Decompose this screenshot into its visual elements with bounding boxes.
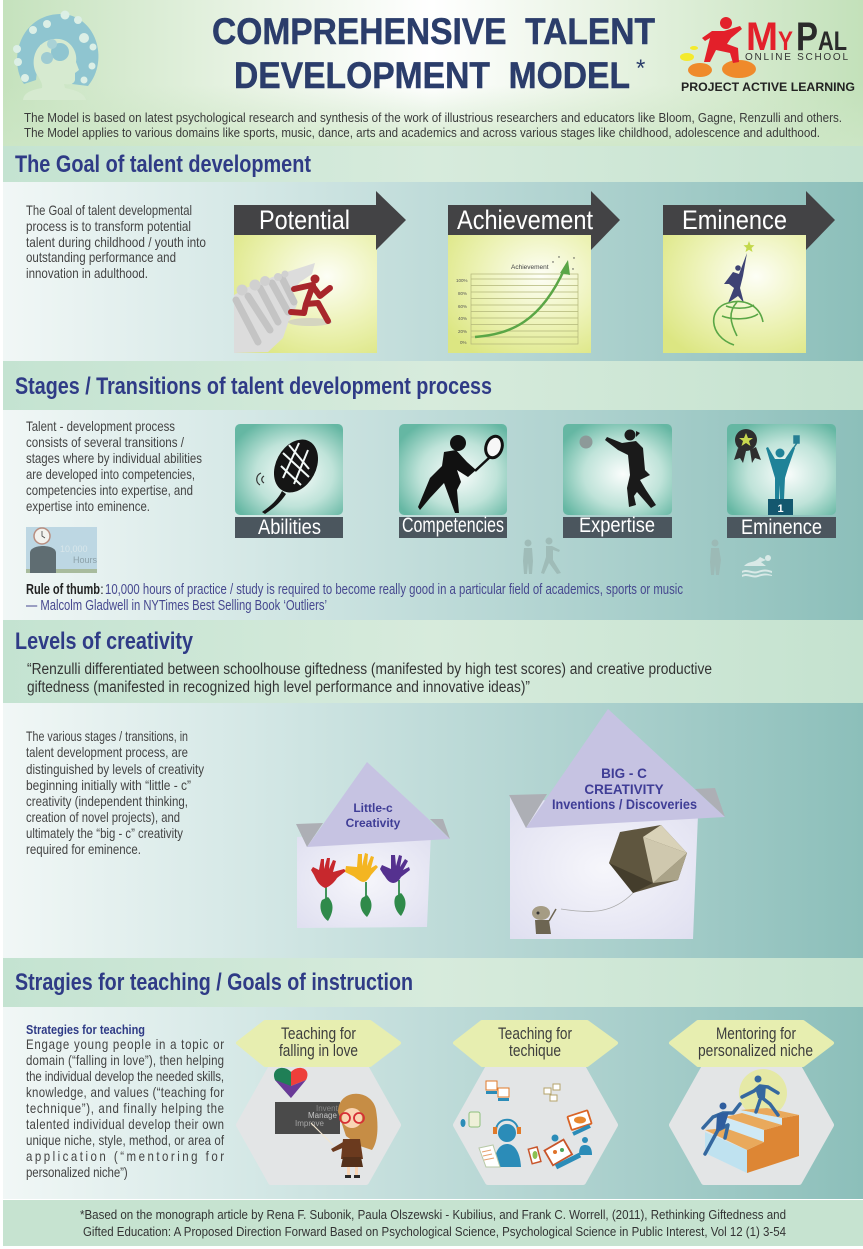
goal text [26,202,206,281]
title: * [636,55,645,82]
goal text: process is to transform potential [26,218,191,234]
house: little-c creativity: Little-c [353,801,393,815]
icon: head with idea circles [13,10,99,100]
section heading: strategies [3,958,863,1007]
creativity text: talent development process, are [26,744,188,760]
stages text: Talent - development process [26,418,175,434]
rule of thumb: : [100,581,104,597]
card: potential [234,191,406,353]
house: little-c creativity [296,762,450,928]
section heading: goal: The Goal of talent development [15,151,311,178]
section heading: strategies: Stragies for teaching / Goals of instruction [15,969,413,996]
panel: stages [3,410,863,620]
card: achievement [448,191,620,353]
house: big-c creativity: CREATIVITY [584,782,664,797]
creativity text: creation of novel projects), and [26,809,180,825]
footnote band [3,1200,863,1246]
logo: MyPal Online School: P [796,15,818,59]
logo: MyPal Online School: PROJECT ACTIVE LEARNING [681,80,855,94]
strategies text: talented individual develop their own [26,1116,224,1132]
card: eminence stage: Eminence [741,516,822,539]
rule of thumb: 10,000 hours of practice / study is required to become really good in a particular field of academics, sports or music [105,582,683,598]
goal text: talent during childhood / youth into [26,234,206,250]
icon: handprint flowers [311,853,410,921]
icon: clock 10,000 hours [26,527,98,573]
stages text: expertise into eminence. [26,498,150,514]
icon: online learner and devices [460,1081,592,1167]
creativity text: ultimately the “big - c” creativity [26,825,183,841]
icon: small robot [532,906,556,934]
icon: player silhouette [580,430,656,508]
panel: creativity [3,703,863,958]
card: abilities: Abilities [258,516,321,539]
creativity text [26,728,204,857]
hexagon: falling in love [238,1022,399,1182]
quote: “Renzulli differentiated between schoolhouse giftedness (manifested by high test scores) and creative productive [27,661,712,678]
hexagon: technique [455,1022,616,1182]
icon: tennis player [418,434,505,513]
card: eminence stage [727,424,836,539]
card: abilities [235,424,343,539]
chart: growth curve: 0% [460,340,467,345]
logo: MyPal Online School: AL [818,26,847,56]
strategies text: personalized niche”) [26,1164,128,1180]
stages text [26,418,202,514]
icon: blackboard: Invent [316,1104,339,1113]
intro text [24,110,842,140]
hexagon: niche [671,1022,832,1182]
header banner [3,0,863,146]
creativity text: creativity (independent thinking, [26,793,188,809]
quote: giftedness (manifested in recognized high level performance and innovative ideas)” [27,679,530,696]
icon: figure reaching star over globe [714,241,763,345]
hexagon: niche: Mentoring for [716,1024,796,1043]
card: competencies: Competencies [402,514,504,537]
logo: MyPal Online School: Y [778,26,793,56]
hexagon: technique: techique [509,1041,561,1060]
rule of thumb [26,581,683,614]
icon: heart [274,1068,307,1098]
house: little-c creativity: Creativity [346,816,401,830]
chart: growth curve: 20% [458,329,467,334]
card: expertise: Expertise [579,514,655,537]
chart: growth curve: Achievement [511,264,549,271]
chart: growth curve: 60% [458,304,467,309]
goal text: innovation in adulthood. [26,265,148,281]
section heading: stages: Stages / Transitions of talent development process [15,373,492,400]
quote [27,661,712,696]
strategies text: technique”), and finally helping the [26,1100,224,1116]
strategies text: application (“mentoring for [26,1148,225,1164]
panel: strategies [3,1007,863,1199]
logo: MyPal Online School: ONLINE SCHOOL [745,52,848,63]
icon: blackboard: Improve [295,1119,324,1128]
icon: teacher [311,1094,377,1178]
creativity text: The various stages / transitions, in [26,728,188,744]
hexagon: falling in love: falling in love [279,1041,358,1060]
hexagon: niche: personalized niche [698,1041,813,1060]
chart: growth curve: 40% [458,316,467,321]
stages text: competencies into expertise, and [26,482,193,498]
hexagon: falling in love: Teaching for [281,1024,356,1043]
card: competencies [399,424,507,538]
strategies text: knowledge, and values (“teaching for [26,1084,225,1100]
strategies text: Engage young people in a topic or [26,1036,225,1052]
arrow: potential [234,191,406,250]
panel: goal [3,182,863,361]
strategies text [26,1023,225,1180]
rule of thumb: Rule of thumb [26,582,100,598]
logo: MyPal Online School: M [746,15,778,59]
title [212,11,655,96]
footnote band: Gifted Education: A Proposed Direction Forward Based on Psychological Science, Psychological Science in Public Interest, Vol 12 (1) 3-54 [83,1225,786,1239]
stages text: are developed into competencies, [26,466,195,482]
faint sports silhouettes [523,538,772,577]
strategies text: the individual develop the needed skills, [26,1068,224,1084]
card: eminence [663,191,835,353]
section heading: stages [3,361,863,410]
goal text: outstanding performance and [26,249,176,265]
icon: medal and podium: 1 [777,503,784,515]
arrow: achievement [448,191,620,250]
chart: growth curve: 80% [458,291,467,296]
creativity text: distinguished by levels of creativity [26,761,204,777]
rule of thumb: — Malcolm Gladwell in NYTimes Best Selling Book ‘Outliers’ [26,598,327,614]
card: achievement: Achievement [457,205,593,235]
section heading: levels of creativity [3,620,863,703]
stages text: stages where by individual abilities [26,450,202,466]
house: big-c creativity [509,709,725,939]
icon: clock 10,000 hours: Hours [73,555,98,565]
house: big-c creativity: BIG - C [601,766,647,781]
icon: racket [257,432,327,514]
card: eminence: Eminence [682,205,787,235]
creativity text: beginning initially with “little - c” [26,777,191,793]
title: DEVELOPMENT MODEL [234,55,630,96]
title: COMPREHENSIVE TALENT [212,11,655,52]
card: expertise [563,424,672,538]
goal text: The Goal of talent developmental [26,202,192,218]
section heading: levels of creativity: Levels of creativity [15,628,194,655]
section heading: goal [3,146,863,182]
strategies text: domain (“falling in love”), then helping [26,1052,224,1068]
icon: runner leading crowd [234,263,332,353]
icon: polyhedron kite [561,825,687,912]
icon: mentor helping climber on stairs [703,1069,799,1173]
card: potential: Potential [259,205,350,235]
icon: blackboard: Manage [308,1111,337,1120]
chart: growth curve: 100% [456,278,468,283]
icon: blackboard [275,1102,340,1134]
chart: growth curve [456,256,578,345]
footnote band: *Based on the monograph article by Rena F. Subonik, Paula Olszewski - Kubilius, and Frank C. Worrell, (2011), Rethinking Giftedness and [80,1208,786,1222]
strategies text: unique niche, style, method, or area of [26,1132,224,1148]
arrow: eminence [663,191,835,250]
hexagon: technique: Teaching for [498,1024,572,1043]
house: big-c creativity: Inventions / Discoveries [552,797,697,812]
creativity text: required for eminence. [26,841,141,857]
strategies text: Strategies for teaching [26,1023,145,1037]
icon: clock 10,000 hours: 10,000 [60,544,88,554]
stages text: consists of several transitions / [26,434,184,450]
logo: MyPal Online School [680,15,855,94]
